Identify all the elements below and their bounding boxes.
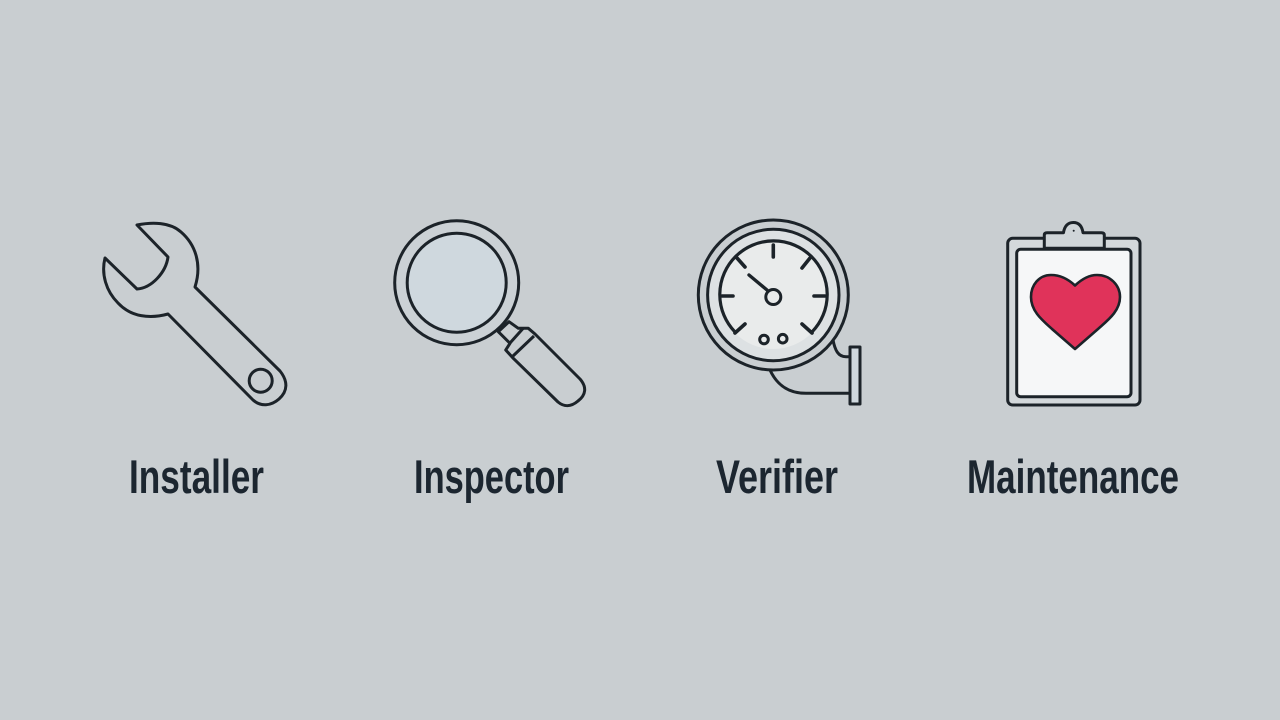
role: Maintenance bbox=[967, 222, 1179, 503]
role: Inspector bbox=[395, 221, 585, 503]
role: Verifier bbox=[698, 220, 860, 503]
label: Installer: Installer bbox=[129, 450, 264, 503]
pipe bbox=[770, 340, 850, 393]
flange bbox=[850, 347, 860, 404]
label: Inspector: Inspector bbox=[414, 450, 569, 503]
icon: magnifying glass bbox=[395, 221, 585, 406]
role: Installer bbox=[104, 223, 286, 503]
icon: wrench bbox=[104, 223, 286, 405]
icon: pressure gauge bbox=[698, 220, 860, 404]
heart bbox=[1031, 275, 1120, 349]
gauge rings bbox=[698, 220, 848, 370]
dial ticks bbox=[722, 245, 825, 333]
needle bbox=[749, 275, 767, 290]
icon: clipboard with heart bbox=[1008, 222, 1140, 405]
indicator dots bbox=[760, 335, 768, 344]
label: Verifier: Verifier bbox=[716, 450, 838, 503]
label: Maintenance: Maintenance bbox=[967, 450, 1179, 503]
